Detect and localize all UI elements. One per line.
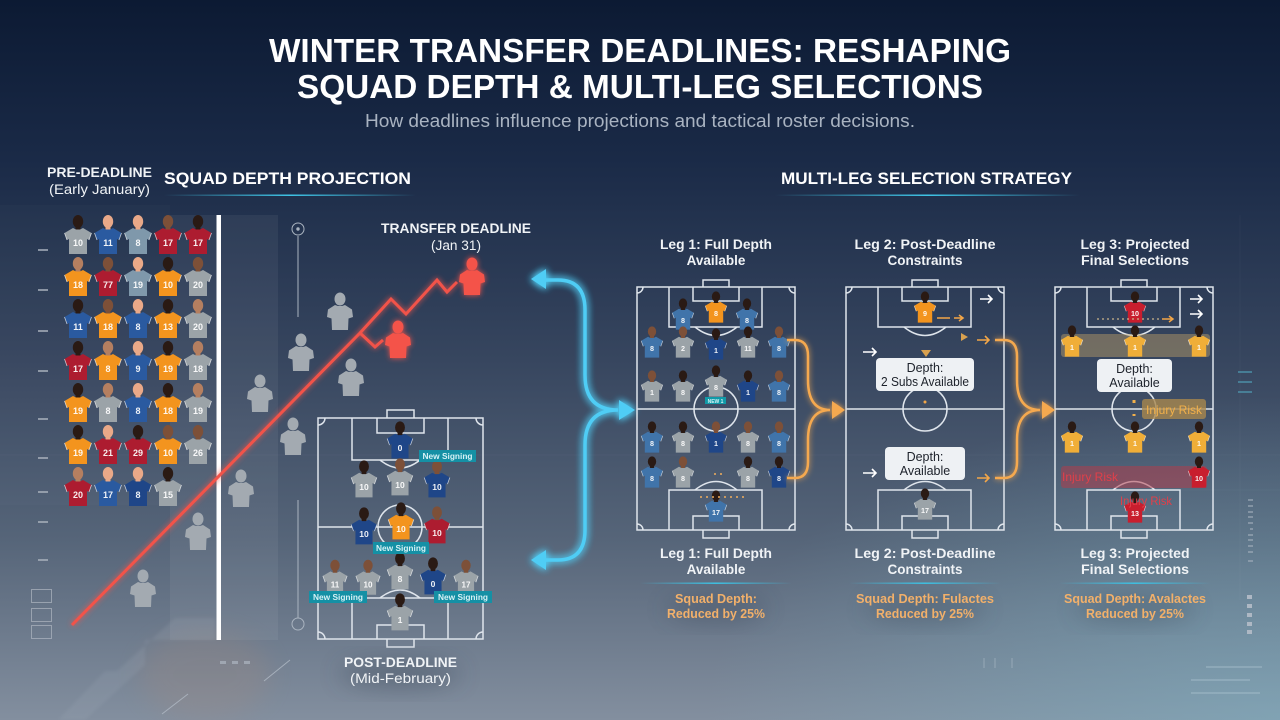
roster row 1: 8 [135,238,141,248]
grey player silhouettes [130,292,364,607]
roster row 7: 20 [73,490,83,500]
leg 1 players [641,291,790,522]
roster row 1: 11 [103,238,113,248]
callout: depth available: Depth: [1116,362,1153,376]
tag: new signing small [705,397,726,405]
leg 1 players: 1 [746,388,750,397]
leg 3 players: 1 [1197,343,1201,352]
leg 2 footer: Reduced by 25% [876,606,974,621]
post-deadline players: 0 [431,579,436,589]
leg 1 players: 8 [681,388,685,397]
leg 1 players: 8 [745,316,749,325]
arrow: orange merge 2 [995,340,1055,478]
leg 1 players: 8 [746,474,750,483]
roster row 6: 19 [73,448,83,458]
pitch: leg 1 [637,280,795,538]
roster row 3: 11 [73,322,83,332]
roster: pre-deadline squad [64,215,212,506]
leg 3 players: 1 [1133,343,1137,352]
tag: injury risk amber: Injury Risk [1146,403,1203,417]
roster row 3 [64,299,212,338]
leg 1 footer: Leg 1: Full Depth [660,546,772,561]
pitch lines [318,410,483,647]
roster row 1: 17 [193,238,203,248]
callout: depth available: Available [900,464,950,478]
leg 1 players: 1 [714,439,718,448]
roster row 5: 19 [193,406,203,416]
leg 1 players: 8 [714,309,718,318]
callout: depth 2 subs [876,358,974,391]
roster row 4: 19 [163,364,173,374]
leg 1 players: 1 [650,388,654,397]
leg 2 players: 9 [923,309,927,318]
leg 3 footer: Leg 3: Projected [1080,546,1190,561]
leg 3 players: 1 [1070,343,1074,352]
subtitle: How deadlines influence projections and tactical roster decisions. [365,110,915,131]
post-deadline players: 10 [359,529,369,539]
roster row 2: 20 [193,280,203,290]
transfer deadline label: (Jan 31) [431,238,481,253]
label: injury risk red: Injury Risk [1062,470,1119,484]
leg 1 players: 8 [777,388,781,397]
roster row 7: 15 [163,490,173,500]
roster row 4 [64,341,212,380]
leg 2 footer: Squad Depth: Fulactes [856,591,994,606]
leg 1 players: 2 [681,344,685,353]
timeline markers [292,223,304,630]
post-deadline players [323,421,478,630]
roster row 1: 10 [73,238,83,248]
leg 1 players: 8 [681,316,685,325]
leg 1 players: 17 [712,508,720,517]
leg 1 players: 8 [650,344,654,353]
right side decorations [984,372,1262,693]
roster row 3: 8 [135,322,141,332]
roster row 4: 8 [105,364,111,374]
post-deadline pitch [309,410,492,647]
post-deadline players: 1 [398,615,403,625]
transfer deadline label [381,221,531,253]
red highlighted players [385,258,485,358]
leg 3 players: 13 [1131,509,1139,518]
roster row 2: 77 [103,280,113,290]
leg 1 heading [660,237,772,268]
title: SQUAD DEPTH & MULTI-LEG SELECTIONS [297,68,983,105]
leg 3 players: 10 [1131,309,1139,318]
leg 3 footer [1059,546,1211,622]
post-deadline label: POST-DEADLINE [344,655,457,670]
roster row 6: 26 [193,448,203,458]
callout: depth available: Depth: [907,450,943,464]
leg 2 heading: Constraints [887,253,963,268]
callout: depth 2 subs: Depth: [907,361,943,375]
leg 1 heading: Available [687,253,746,268]
leg 2 footer [849,546,1001,622]
roster row 7 [64,467,182,506]
tag: injury risk amber [1142,399,1206,419]
leg 3 heading [1080,237,1190,268]
pitch: leg 2 [846,280,1004,538]
roster row 4: 17 [73,364,83,374]
roster row 5: 18 [163,406,173,416]
heading: multi-leg selection strategy: MULTI-LEG SELECTION STRATEGY [781,169,1073,188]
leg 3 heading: Leg 3: Projected [1080,237,1190,252]
title [269,32,1011,105]
pre-deadline label: (Early January) [49,182,150,197]
leg 3 players: 1 [1070,439,1074,448]
leg 1 players: 8 [650,474,654,483]
callout: depth available [885,447,965,480]
leg 2 footer: Leg 2: Post-Deadline [854,546,996,561]
roster row 3: 20 [193,322,203,332]
roster row 2: 18 [73,280,83,290]
post-deadline label: (Mid-February) [350,671,451,686]
projection line [72,280,457,625]
yellow highlight band [1061,334,1210,357]
transfer deadline label: TRANSFER DEADLINE [381,221,531,236]
arrow: cyan bracket [531,269,635,570]
arrow: orange merge 1 [787,340,845,478]
post-deadline players: 10 [395,480,405,490]
callout: depth available: Available [1109,376,1160,390]
leg 3 players: 1 [1133,439,1137,448]
post-deadline players: 8 [398,574,403,584]
red highlight band [1061,466,1207,488]
dotted run arrow [700,474,745,497]
callout: depth available [1097,359,1172,392]
leg 3 footer: Final Selections [1081,562,1189,577]
roster row 5: 8 [135,406,141,416]
leg 2 footer: Constraints [887,562,963,577]
leg 1 players: 8 [777,474,781,483]
label: injury risk keeper: Injury Risk [1120,494,1173,508]
roster row 4: 18 [193,364,203,374]
post-deadline players: 17 [461,581,471,590]
roster row 2: 19 [133,280,143,290]
leg 1 players: 8 [714,383,718,392]
leg 1 players: 11 [744,344,752,353]
roster row 7: 8 [135,490,141,500]
roster row 1: 17 [163,238,173,248]
roster row 5: 19 [73,406,83,416]
leg 1 players: 8 [746,439,750,448]
roster row 1 [64,215,212,254]
leg 1 footer: Reduced by 25% [667,606,765,621]
timeline divider [216,215,221,640]
roster row 3: 13 [163,322,173,332]
roster row 6: 29 [133,448,143,458]
post-deadline players: 11 [331,581,340,590]
roster row 5 [64,383,212,422]
leg 1 footer [640,546,792,622]
roster row 4: 9 [135,364,141,374]
leg 3 footer: Reduced by 25% [1086,606,1184,621]
heading: squad depth projection: SQUAD DEPTH PROJECTION [164,169,411,188]
leg 3 players [1061,291,1210,523]
leg 3 players: 1 [1197,439,1201,448]
leg 1 players: 8 [650,439,654,448]
leg 2 heading [854,237,996,268]
pitch: leg 3 [1055,280,1213,538]
roster row 2 [64,257,212,296]
leg 3 footer: Squad Depth: Avalactes [1064,591,1206,606]
post-deadline players: 10 [363,581,373,590]
pre-deadline label [47,165,152,197]
leg 3 players: 10 [1195,474,1203,483]
post-deadline players: 10 [396,524,406,534]
leg 2 players [914,291,936,520]
tag: new signing small: NEW 1 [708,399,724,405]
post-deadline players: 10 [432,482,442,492]
leg 1 players: 8 [777,439,781,448]
roster row 3: 18 [103,322,113,332]
leg 1 players: 1 [714,346,718,355]
leg 1 players: 8 [777,344,781,353]
roster row 6: 21 [103,448,113,458]
title: WINTER TRANSFER DEADLINES: RESHAPING [269,32,1011,69]
leg 1 players: 8 [681,439,685,448]
roster row 7: 17 [103,490,113,500]
roster row 2: 10 [163,280,173,290]
roster row 6: 10 [163,448,173,458]
leg 2 heading: Leg 2: Post-Deadline [854,237,996,252]
post-deadline players: 10 [359,482,369,492]
leg 1 footer: Available [687,562,746,577]
new signing tags: New Signing [376,544,426,553]
leg 1 footer: Squad Depth: [675,591,757,606]
movement arrows [1097,295,1202,416]
post-deadline players: 0 [398,443,403,453]
leg 3 heading: Final Selections [1081,253,1189,268]
new signing tags: New Signing [422,452,473,461]
new signing tags: New Signing [438,593,488,602]
left side ticks [32,249,290,714]
callout: depth 2 subs: 2 Subs Available [881,375,969,389]
new signing tags: New Signing [313,593,363,602]
leg 1 players: 8 [681,474,685,483]
leg 2 players: 17 [921,506,929,515]
roster row 6 [64,425,212,464]
roster row 5: 8 [105,406,111,416]
post-deadline players: 10 [432,528,442,538]
pre-deadline label: PRE-DEADLINE [47,165,152,180]
post-deadline label [340,655,460,688]
movement arrows [863,295,992,482]
leg 1 heading: Leg 1: Full Depth [660,237,772,252]
new signing tags [309,450,492,603]
